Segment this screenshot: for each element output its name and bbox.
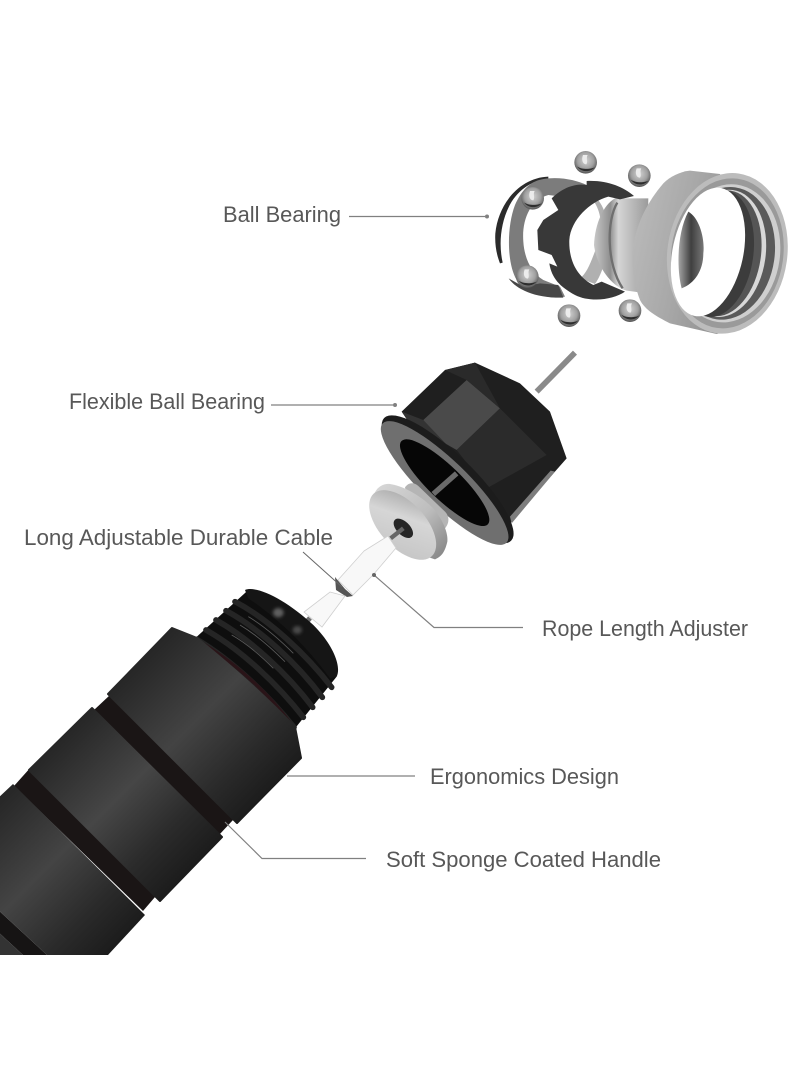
connector: [335, 577, 353, 597]
icon: silver adjuster nut: [357, 478, 448, 572]
steel balls: [516, 151, 651, 327]
cap body: [402, 363, 567, 523]
steel pin: [303, 618, 310, 626]
icon: black faceted bearing cap: [367, 353, 575, 559]
light far ring: [580, 198, 608, 284]
nut body: [373, 484, 447, 559]
label: Flexible Ball Bearing: [69, 389, 397, 414]
thin outer arc: [495, 177, 548, 263]
label: Flexible Ball Bearing: Flexible Ball Bearing: [69, 389, 265, 414]
icon: white cable adjuster tube: [303, 536, 396, 627]
dark bands: [94, 695, 233, 835]
flange: [367, 400, 529, 559]
silver outer nut: [632, 165, 798, 342]
grip segment 3: [0, 784, 145, 955]
rod: [537, 353, 575, 392]
label: Rope Length Adjuster: Rope Length Adjuster: [542, 616, 748, 641]
lower tube: [304, 592, 345, 627]
thread ridges: [197, 602, 332, 727]
label: Long Adjustable Durable Cable: Long Adjustable Durable Cable: [24, 525, 333, 550]
red base ring: [195, 639, 294, 728]
nut face: [357, 478, 448, 572]
internal thread: [666, 177, 789, 329]
threaded end cap: [245, 589, 338, 678]
label: Soft Sponge Coated Handle: Soft Sponge Coated Handle: [386, 847, 661, 872]
label: Soft Sponge Coated Handle: [225, 822, 661, 872]
grip segment 1: [108, 628, 301, 823]
icon: foam handle: [0, 628, 301, 955]
hub: [405, 483, 448, 532]
upper tube: [338, 536, 396, 595]
grip segment 4: [0, 930, 23, 955]
silver neck: [594, 198, 648, 293]
label: Rope Length Adjuster: [372, 573, 748, 641]
bearing cage and neck: [495, 177, 648, 300]
centre hole: [390, 515, 417, 542]
rod through nut: [391, 528, 403, 538]
label: Long Adjustable Durable Cable: [24, 525, 342, 587]
cap highlights: [273, 608, 284, 617]
label: Ergonomics Design: Ergonomics Design: [430, 764, 619, 789]
label: Ball Bearing: Ball Bearing: [223, 202, 341, 227]
label: Ball Bearing: [223, 202, 489, 227]
cap opening: [390, 429, 499, 536]
black cage ring: [537, 181, 634, 300]
icon: ball bearing assembly: [495, 151, 798, 342]
white opening: [660, 181, 756, 323]
inner pin: [433, 473, 457, 494]
icon: threaded handle end: [195, 589, 338, 728]
thread body: [195, 590, 337, 728]
grey notched ring: [509, 178, 587, 297]
rear opening showing neck bore: [678, 212, 704, 288]
nut face ring: [657, 165, 798, 342]
grip segment 2: [29, 708, 222, 901]
